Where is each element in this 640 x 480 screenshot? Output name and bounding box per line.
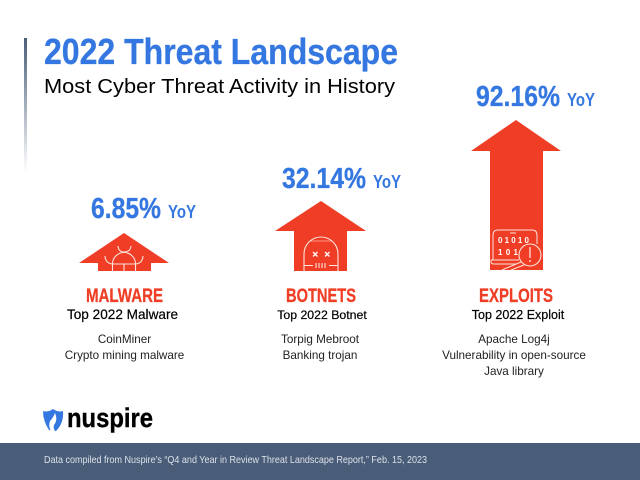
exploits label block: Java library — [484, 365, 544, 378]
footer source text: Data compiled from Nuspire’s “Q4 and Year in Review Threat Landscape Report,” Feb. 15, 2023 — [44, 455, 427, 466]
title: 2022 Threat Landscape — [44, 31, 398, 72]
botnets label block: BOTNETS — [286, 286, 356, 307]
icon: laptop exploit: 01010 — [498, 236, 530, 245]
botnets statistic: 32.14% — [282, 163, 366, 195]
malware label block: MALWARE — [86, 286, 163, 307]
icon: bug — [105, 246, 143, 271]
botnets label block — [277, 286, 367, 362]
malware label block: Top 2022 Malware — [67, 307, 178, 322]
malware arrow — [79, 233, 169, 271]
logo wordmark: nuspire — [67, 403, 153, 433]
exploits label block: EXPLOITS — [479, 286, 553, 307]
footer — [0, 443, 640, 480]
exploits label block: Apache Log4j — [478, 333, 550, 346]
malware label block — [65, 286, 184, 362]
botnets statistic: YoY — [373, 172, 401, 192]
panel: exploits — [471, 81, 595, 270]
malware statistic: 6.85% — [91, 193, 161, 225]
subtitle: Most Cyber Threat Activity in History — [44, 76, 395, 98]
panel: malware — [79, 193, 196, 271]
botnets label block: Banking trojan — [283, 349, 357, 362]
icon: dead bot — [304, 237, 338, 271]
malware label block: CoinMiner — [98, 333, 151, 346]
botnets arrow — [275, 201, 366, 271]
botnets label block: Torpig Mebroot — [281, 333, 360, 346]
exploits label block: Vulnerability in open-source — [442, 349, 586, 362]
exploits statistic: YoY — [567, 90, 595, 110]
icon: laptop exploit: 101 — [498, 248, 519, 257]
exploits arrow — [471, 120, 561, 270]
exploits label block — [442, 286, 586, 378]
icon: shield — [43, 409, 63, 431]
decorative gradient bar — [24, 38, 27, 172]
icon: laptop exploit — [491, 230, 541, 270]
panel: botnets — [275, 163, 401, 271]
malware statistic: YoY — [168, 202, 196, 222]
logo: nuspire — [43, 403, 153, 433]
botnets label block: Top 2022 Botnet — [277, 308, 367, 322]
exploits label block: Top 2022 Exploit — [472, 308, 565, 322]
exploits statistic: 92.16% — [476, 81, 560, 113]
malware label block: Crypto mining malware — [65, 349, 184, 362]
